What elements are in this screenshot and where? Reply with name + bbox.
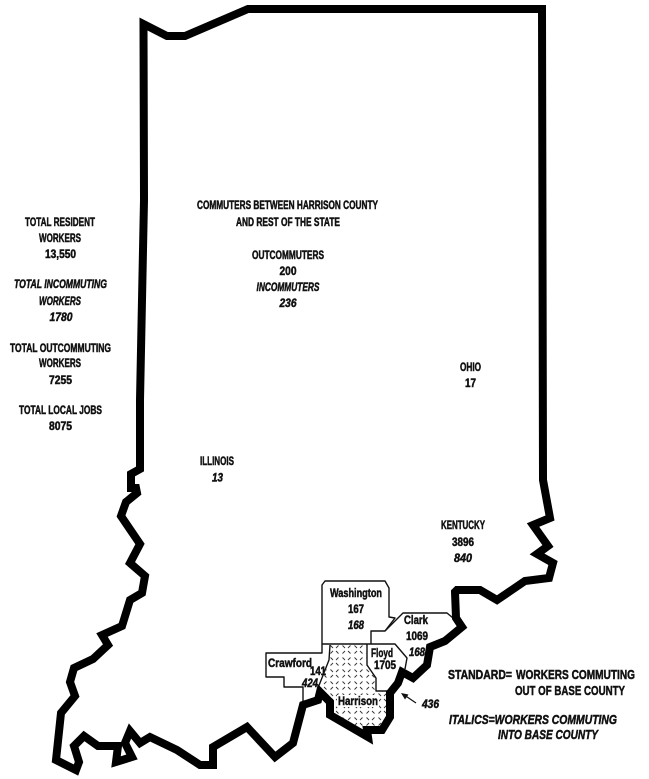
text block: commuters with rest of state: OUTCOMMUTERS	[252, 248, 324, 262]
label: Clark County: 168	[409, 645, 425, 659]
label: Crawford County: 424	[301, 676, 318, 690]
map: county boundaries	[266, 581, 453, 702]
label: Illinois	[200, 454, 234, 484]
label: Crawford County: 141	[310, 664, 326, 678]
text block: county totals: 1780	[50, 310, 73, 324]
text block: county totals: TOTAL RESIDENT	[25, 215, 95, 229]
text block: commuters with rest of state: COMMUTERS BETWEEN HARRISON COUNTY	[197, 198, 378, 212]
text block: commuters with rest of state: AND REST OF THE STATE	[236, 215, 340, 229]
legend: INTO BASE COUNTY	[498, 727, 599, 742]
map: Harrison County hatched area	[320, 645, 388, 735]
county boundary: Clark	[385, 613, 453, 631]
text block: county totals: 8075	[49, 419, 72, 433]
label: Floyd County: Floyd	[371, 646, 393, 660]
label: Floyd County: 1705	[374, 658, 396, 672]
label: Crawford County	[268, 656, 326, 690]
county boundary: Harrison west edge	[318, 645, 330, 688]
text block: commuters with rest of state: 236	[279, 296, 297, 310]
text block: county totals: TOTAL INCOMMUTING	[14, 277, 107, 291]
label: Ohio	[460, 360, 481, 390]
label: Kentucky: 840	[454, 551, 472, 565]
label: Kentucky	[441, 518, 485, 565]
label: Harrison County: Harrison	[338, 694, 378, 708]
label: Washington County: Washington	[330, 586, 382, 600]
label: Floyd County	[371, 646, 396, 672]
legend	[448, 667, 635, 742]
label: Ohio: 17	[465, 376, 476, 390]
text block: county totals: TOTAL LOCAL JOBS	[19, 403, 102, 417]
text block: commuters with rest of state: INCOMMUTERS	[256, 280, 320, 294]
label: Clark County: Clark	[404, 613, 428, 627]
county boundary: Crawford	[266, 644, 322, 702]
text block: county totals: 7255	[49, 373, 72, 387]
map: Indiana state outline	[56, 9, 553, 770]
label: Washington County: 167	[348, 602, 364, 616]
label: Kentucky: 3896	[452, 535, 474, 549]
text block: county totals: WORKERS	[39, 356, 81, 370]
label: Illinois: ILLINOIS	[200, 454, 234, 468]
text block: commuters with rest of state: 200	[280, 264, 297, 278]
label: Clark County: 1069	[406, 629, 428, 643]
label: Kentucky: KENTUCKY	[441, 518, 485, 532]
text block: county totals: TOTAL OUTCOMMUTING	[10, 341, 111, 355]
label: Ohio: OHIO	[460, 360, 481, 374]
text block: commuters with rest of state	[197, 198, 378, 310]
text block: county totals: WORKERS	[39, 231, 81, 245]
label: 436 incommuters: 436	[421, 697, 439, 711]
text block: county totals: WORKERS	[39, 294, 81, 308]
label: Clark County	[404, 613, 428, 659]
label: Washington County	[330, 586, 382, 632]
text block: county totals: 13,550	[45, 247, 76, 261]
text block: county totals	[10, 215, 111, 433]
county boundary: Floyd	[322, 644, 407, 691]
arrow: to Harrison County	[401, 693, 416, 703]
label: Washington County: 168	[348, 618, 364, 632]
county boundary: Washington	[322, 581, 395, 644]
label: Crawford County: Crawford	[268, 656, 312, 670]
label: Illinois: 13	[212, 470, 223, 484]
legend: STANDARD=	[448, 667, 512, 682]
